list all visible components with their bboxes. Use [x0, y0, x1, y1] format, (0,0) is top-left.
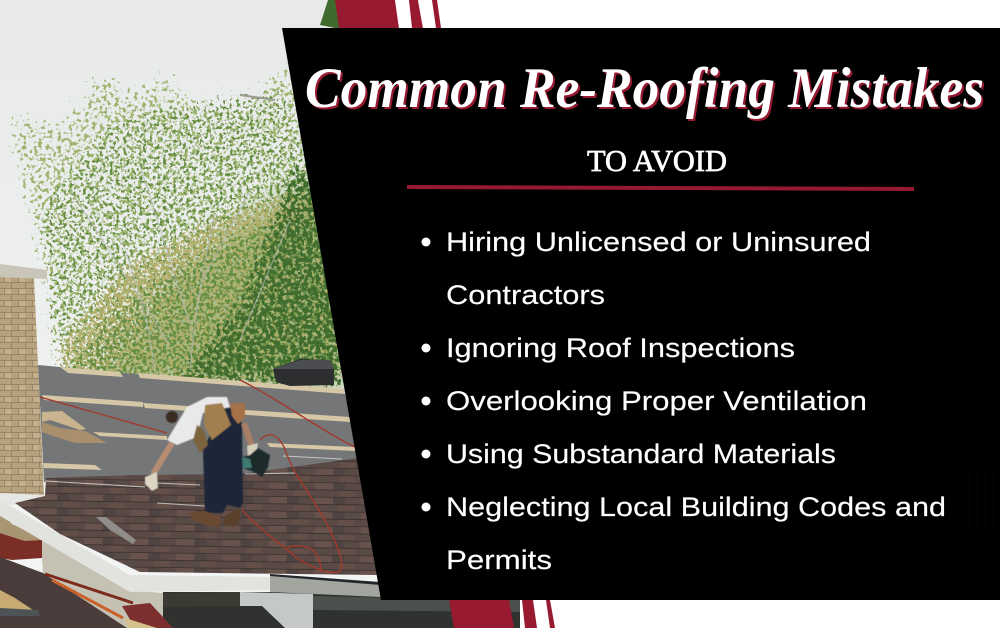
gloves [145, 472, 158, 491]
item: codes: Neglecting Local Building Codes and [446, 492, 946, 522]
red air hoses [40, 380, 355, 572]
item: codes [422, 492, 946, 575]
chimney [0, 264, 47, 560]
arm right [244, 423, 252, 447]
loose shingle [96, 517, 136, 544]
boots [190, 511, 221, 527]
soffit and underside [42, 535, 520, 628]
tool belt [204, 403, 231, 440]
roof vent [273, 359, 334, 386]
tree [0, 0, 350, 390]
shirt [167, 397, 230, 445]
item: ventilation: Overlooking Proper Ventilation [446, 386, 867, 416]
white flashing lines [45, 456, 342, 506]
item: hiring: Hiring Unlicensed or Uninsured [446, 227, 871, 257]
lower roof and broom [0, 557, 173, 628]
top accent stripes [335, 0, 441, 28]
head [166, 411, 178, 423]
subtitle: TO AVOID [587, 143, 727, 178]
mistakes list [422, 227, 946, 575]
roofing photo [0, 0, 520, 628]
item: materials: Using Substandard Materials [446, 439, 836, 469]
wood strips [42, 367, 356, 470]
underlayment roof deck [38, 365, 362, 482]
torn paper [42, 411, 107, 443]
arm left [153, 443, 172, 474]
item: inspections: Ignoring Roof Inspections [446, 333, 795, 363]
sky [0, 0, 400, 628]
black content panel [282, 28, 1000, 600]
nail gun [242, 448, 270, 477]
subtitle divider [407, 185, 914, 191]
item: hiring: Contractors [446, 280, 605, 310]
shingles [15, 458, 377, 575]
item: hiring [422, 227, 871, 310]
bottom accent stripes [449, 600, 1000, 628]
item: codes: Permits [446, 545, 552, 575]
fascia and gutter [0, 500, 381, 597]
legs [203, 408, 243, 513]
roofer [145, 397, 270, 527]
